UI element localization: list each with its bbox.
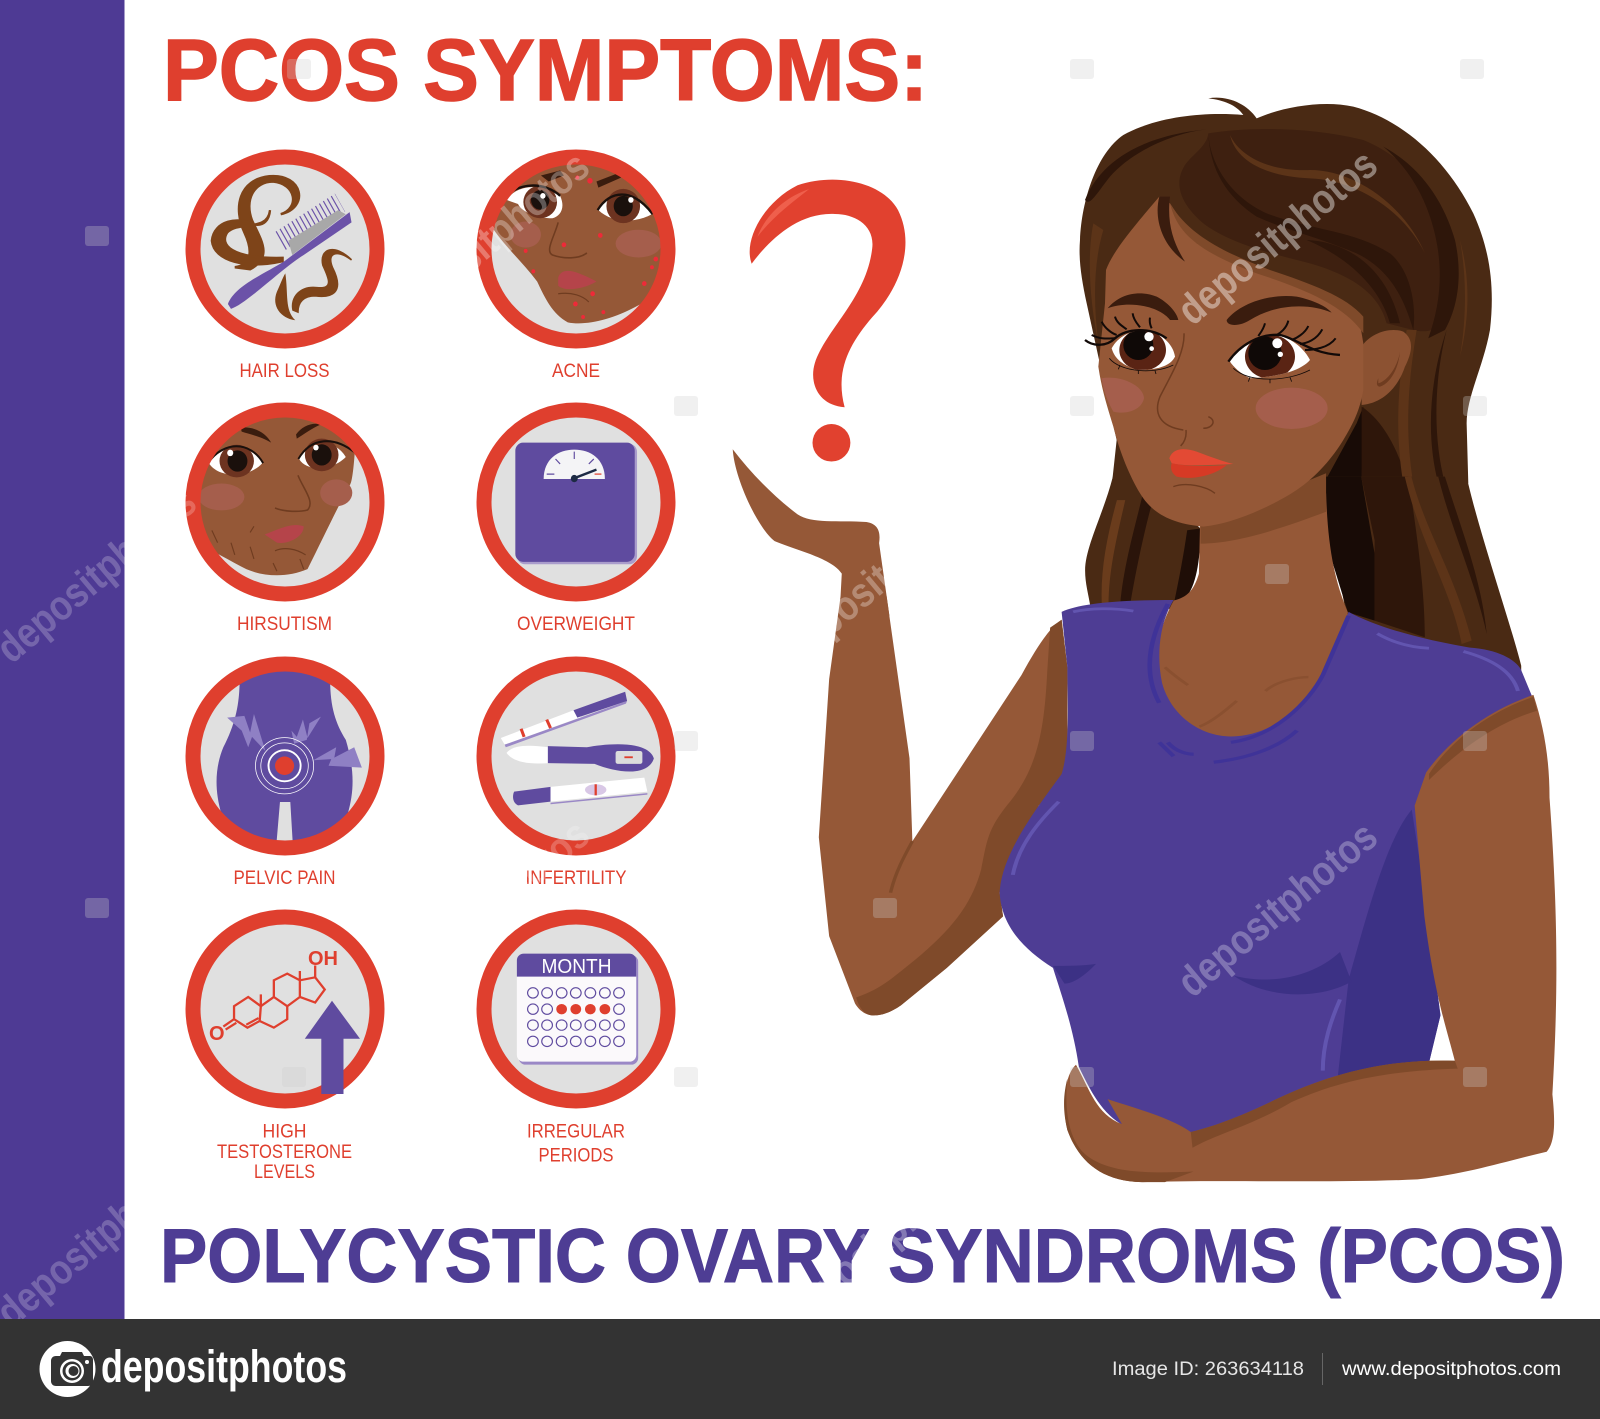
blush left <box>1102 378 1144 413</box>
face <box>1085 197 1363 527</box>
eyebrows <box>1108 293 1332 325</box>
icon: bathroom scale <box>515 443 637 564</box>
calendar heading: MONTH <box>542 956 612 978</box>
title: PCOS SYMPTOMS: <box>163 22 928 119</box>
panel: overweight <box>484 410 668 635</box>
label: high testosterone levels: TESTOSTERONE <box>217 1142 352 1163</box>
icon: hair and brush <box>212 176 352 320</box>
label: irregular periods: PERIODS <box>538 1146 614 1167</box>
panel: irregular periods <box>484 917 668 1167</box>
illustration: woman <box>733 98 1556 1182</box>
arrow: up <box>305 1001 360 1094</box>
panel: hair loss <box>193 157 377 382</box>
molecule label: OH: OH <box>308 948 338 970</box>
label: irregular periods: IRREGULAR <box>527 1122 625 1142</box>
watermarks: depositphotos <box>1168 140 1386 334</box>
watermarks: depositphotos <box>380 810 598 1004</box>
purple top <box>1000 600 1532 1134</box>
lips <box>1169 449 1233 478</box>
chin crease <box>1173 485 1215 493</box>
right eye <box>1228 321 1340 383</box>
image id: Image ID: 263634118 <box>1112 1359 1304 1380</box>
label: acne: ACNE <box>552 361 600 382</box>
raised arm and hand <box>733 449 1067 1015</box>
watermarks: depositphotos <box>1168 812 1386 1006</box>
neck <box>1153 473 1348 748</box>
panel: acne <box>480 151 675 382</box>
label: infertility: INFERTILITY <box>526 868 627 889</box>
icon: face with facial hair <box>200 418 355 576</box>
footer bar <box>0 1319 1600 1419</box>
watermark camera marks <box>85 59 1487 1087</box>
left eye <box>1085 313 1175 374</box>
website url: www.depositphotos.com <box>1341 1359 1561 1380</box>
panel: infertility <box>484 664 668 889</box>
question mark <box>750 180 905 462</box>
label: pelvic pain: PELVIC PAIN <box>234 868 336 889</box>
panel: high testosterone <box>193 917 377 1183</box>
watermarks: depositphotos <box>773 1142 991 1336</box>
molecule label: O: O <box>209 1023 225 1045</box>
icon: face with acne <box>494 164 660 324</box>
footer logo icon <box>40 1341 96 1397</box>
nose <box>1158 333 1213 446</box>
label: high testosterone levels: HIGH <box>262 1122 306 1142</box>
icon: testosterone molecule <box>223 966 325 1030</box>
footer logo text: depositphotos <box>101 1341 347 1392</box>
label: high testosterone levels: LEVELS <box>254 1162 315 1183</box>
watermarks: depositphotos <box>380 142 598 336</box>
left purple sidebar <box>0 0 124 1319</box>
panel: pelvic pain <box>193 664 377 889</box>
label: hair loss: HAIR LOSS <box>240 361 330 382</box>
watermarks: depositphotos <box>773 478 991 672</box>
watermarks <box>0 140 1386 1336</box>
icon: calendar <box>517 954 638 1065</box>
icon: pelvis with pain target <box>217 666 362 847</box>
ear <box>1362 330 1411 405</box>
label: hirsutism: HIRSUTISM <box>237 614 332 635</box>
label: overweight: OVERWEIGHT <box>517 614 635 635</box>
blush right <box>1256 388 1328 429</box>
panel: hirsutism <box>177 408 377 635</box>
folded arm <box>1064 695 1556 1182</box>
hair <box>1080 98 1521 681</box>
icon: pregnancy tests <box>501 692 654 805</box>
